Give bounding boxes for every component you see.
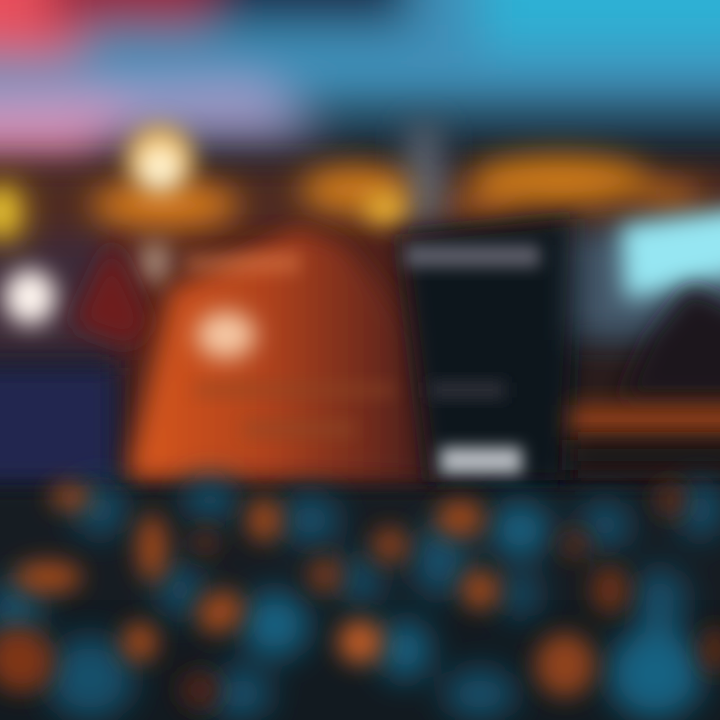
card text <box>430 382 505 398</box>
orange panel <box>128 228 435 478</box>
right side scene <box>570 205 720 470</box>
panel text <box>245 420 355 438</box>
crowd <box>0 478 720 720</box>
orange strip <box>570 405 720 437</box>
card button <box>440 447 522 474</box>
sky <box>0 0 720 175</box>
teal heads <box>0 478 720 720</box>
left navy block <box>0 368 115 483</box>
mid backdrop <box>0 125 720 480</box>
crowd base <box>0 492 720 720</box>
orange heads <box>0 482 720 710</box>
dark card <box>400 218 578 482</box>
warm lights <box>0 156 700 244</box>
crowd lower fill <box>0 600 720 720</box>
cyan screen <box>620 205 720 300</box>
panel text <box>195 382 395 398</box>
card heading <box>405 245 540 267</box>
dark silhouette <box>620 285 720 400</box>
dark red triangle <box>72 240 150 345</box>
bright lamps <box>0 126 407 325</box>
panel label <box>185 252 300 274</box>
panel highlight <box>196 311 256 359</box>
